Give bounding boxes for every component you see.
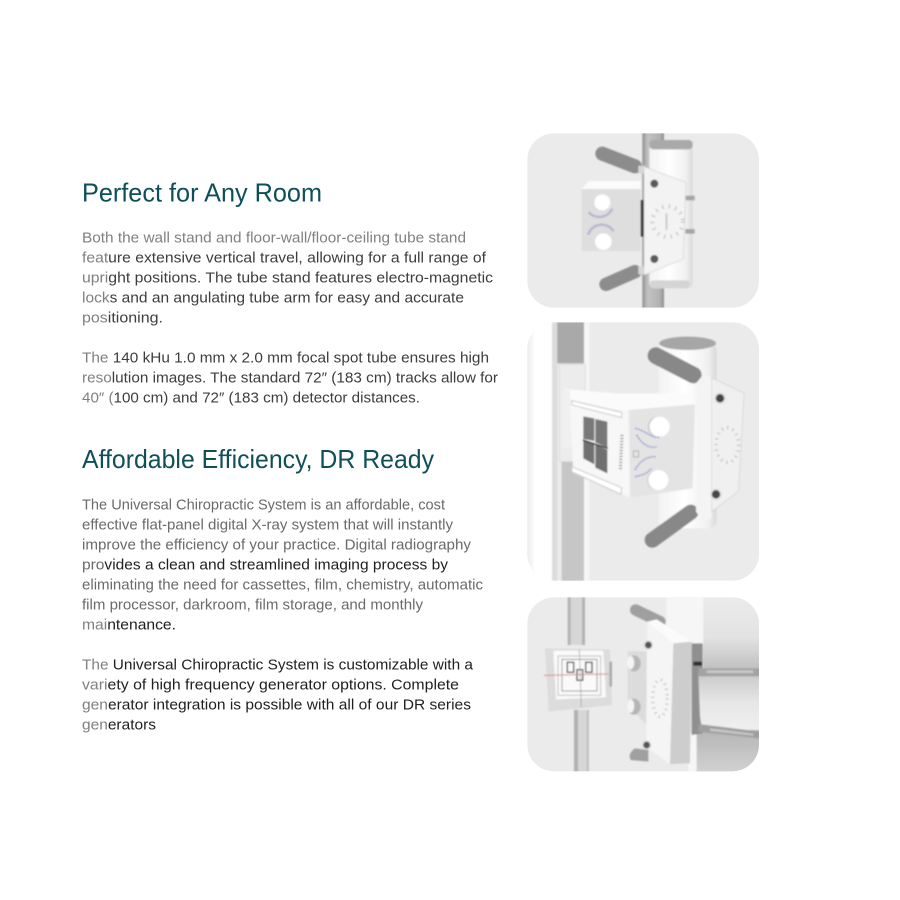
text block: generator options description: generators — [82, 718, 156, 734]
text block: generator options description: variety of high frequency generator options. Complete — [82, 678, 459, 694]
text block: wall stand description: Both the wall stand and floor-wall/floor-ceiling tube stand — [82, 230, 466, 246]
text block: wall stand description: locks and an angulating tube arm for easy and accurate — [82, 290, 464, 306]
text block: affordable system description — [82, 498, 483, 634]
panel: tube stand front view photo — [527, 132, 759, 308]
text block: focal spot tube description: resolution images. The standard 72″ (183 cm) tracks allow for — [82, 370, 498, 386]
text block: affordable system description: effective flat-panel digital X-ray system that will instantly — [82, 518, 454, 534]
text block: wall stand description — [82, 230, 493, 326]
text block: focal spot tube description — [82, 350, 498, 406]
text block: affordable system description: eliminating the need for cassettes, film, chemistry, automatic — [82, 578, 483, 594]
heading: Perfect for Any Room: Perfect for Any Room — [82, 178, 322, 208]
text block: wall stand description: positioning. — [82, 310, 163, 326]
panel: tube stand angled view photo — [527, 322, 759, 582]
text block: affordable system description: improve the efficiency of your practice. Digital radiography — [82, 538, 472, 554]
text block: wall stand description: feature extensive vertical travel, allowing for a full range of — [82, 250, 487, 266]
text block: generator options description: The Universal Chiropractic System is customizable with a — [82, 658, 474, 674]
text block: generator options description — [82, 658, 474, 734]
text block: affordable system description: provides a clean and streamlined imaging process by — [82, 558, 449, 574]
text block: focal spot tube description: 40″ (100 cm) and 72″ (183 cm) detector distances. — [82, 390, 420, 406]
panel: tube stand rear view photo — [527, 597, 760, 773]
icon: dark window on collimator — [583, 416, 608, 473]
heading: Affordable Efficiency, DR Ready: Affordable Efficiency, DR Ready — [82, 444, 434, 474]
infographic page — [82, 133, 759, 772]
text block: focal spot tube description: The 140 kHu 1.0 mm x 2.0 mm focal spot tube ensures high — [82, 350, 489, 366]
bright wall behind the plate — [667, 598, 703, 644]
text block: affordable system description: The Universal Chiropractic System is an affordable, cost — [82, 498, 445, 514]
text block: affordable system description: maintenance. — [82, 618, 176, 634]
text block: affordable system description: film processor, darkroom, film storage, and monthly — [82, 598, 424, 614]
large cylinder, shaded per band — [703, 597, 760, 672]
detector panel with phantom outline — [544, 648, 612, 712]
text block: generator options description: generator integration is possible with all of our DR series — [82, 698, 471, 714]
text block: wall stand description: upright positions. The tube stand features electro-magnetic — [82, 270, 493, 286]
